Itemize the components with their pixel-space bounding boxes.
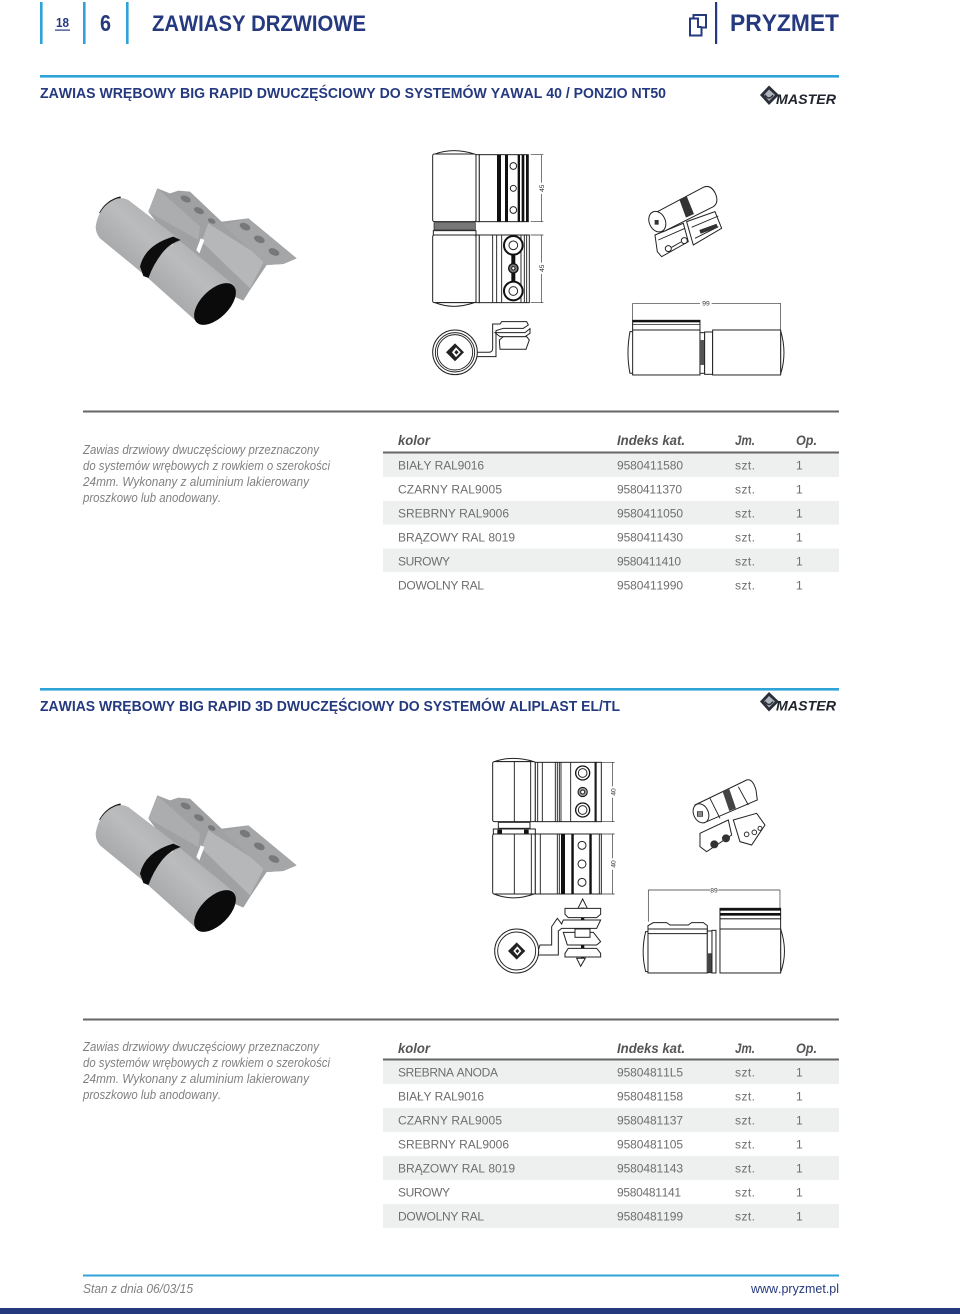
row: brązowy: szt.: [735, 1162, 755, 1176]
row: srebrna anoda: SREBRNA ANODA: [398, 1066, 498, 1080]
row: czarny: [398, 482, 803, 496]
row: dowolny: szt.: [735, 1210, 755, 1224]
logo: Master section 2: [760, 692, 837, 714]
section 1 heading: ZAWIAS WRĘBOWY BIG RAPID DWUCZĘŚCIOWY DO SYSTEMÓW YAWAL 40 / PONZIO NT50: [40, 84, 666, 102]
technical drawing: side view with dimension 99 section 1: 99: [702, 301, 710, 308]
row: srebrny: 1: [796, 1138, 803, 1152]
row: srebrny: 9580481105: [617, 1138, 683, 1152]
table header: kolor: [398, 432, 431, 448]
table header: Jm.: [735, 432, 755, 448]
row: brązowy: 1: [796, 530, 803, 544]
row: biały: 9580411580: [617, 458, 683, 472]
footer: www.pryzmet.pl: [750, 1281, 839, 1296]
description section 2: [82, 1040, 331, 1102]
row: surowy: 1: [796, 1186, 803, 1200]
row: dowolny: 1: [796, 578, 803, 592]
header: page number and section: 6: [100, 10, 111, 36]
row: czarny: 1: [796, 482, 803, 496]
table header: Op.: [796, 1040, 817, 1056]
row: biały: szt.: [735, 1090, 755, 1104]
footer: Stan z dnia 06/03/15: [83, 1282, 193, 1296]
row: dowolny: [398, 578, 803, 592]
header: page number and section: 18: [56, 15, 69, 30]
table header: kolor: [398, 1040, 431, 1056]
row: brązowy: BRĄZOWY RAL 8019: [398, 530, 515, 544]
row: surowy: 9580481141: [617, 1186, 681, 1200]
row: czarny: 1: [796, 1114, 803, 1128]
technical drawing: front views section 1: [433, 151, 529, 306]
divider section 2: [83, 1018, 839, 1020]
logo: Master section 1: MASTER: [776, 91, 837, 107]
row: brązowy: 9580481143: [617, 1162, 683, 1176]
technical drawing: isometric view section 2: [690, 780, 765, 852]
row: brązowy: szt.: [735, 530, 755, 544]
photo: hinge section 2: [96, 795, 297, 939]
row: surowy: SUROWY: [398, 554, 450, 568]
row: dowolny: 9580481199: [617, 1210, 683, 1224]
row: srebrna anoda: [398, 1066, 803, 1080]
row: brązowy: 1: [796, 1162, 803, 1176]
table header: Indeks kat.: [617, 1040, 685, 1056]
row: biały: 1: [796, 458, 803, 472]
row: dowolny: 9580411990: [617, 578, 683, 592]
row: srebrny: SREBRNY RAL9006: [398, 506, 509, 520]
row: dowolny: 1: [796, 1210, 803, 1224]
row: czarny: CZARNY RAL9005: [398, 1114, 502, 1128]
row: dowolny: DOWOLNY RAL: [398, 578, 484, 592]
technical drawing: isometric view section 1: [646, 186, 722, 257]
description section 1: 24mm. Wykonany z aluminium lakierowany: [82, 475, 310, 489]
row: srebrny: SREBRNY RAL9006: [398, 1138, 509, 1152]
description section 2: Zawias drzwiowy dwuczęściowy przeznaczony: [82, 1040, 320, 1054]
description section 2: 24mm. Wykonany z aluminium lakierowany: [82, 1072, 310, 1086]
header: page number and section: ZAWIASY DRZWIOWE: [152, 11, 366, 36]
footer: [0, 1274, 960, 1314]
row: biały: szt.: [735, 458, 755, 472]
row: surowy: 9580411410: [617, 554, 681, 568]
row: surowy: [398, 554, 803, 568]
description section 2: proszkowo lub anodowany.: [82, 1088, 221, 1102]
dimension: 40 mm section 2: 40: [610, 788, 617, 796]
row: srebrny: 9580411050: [617, 506, 683, 520]
row: biały: [398, 1090, 803, 1104]
section 2 heading: ZAWIAS WRĘBOWY BIG RAPID 3D DWUCZĘŚCIOWY DO SYSTEMÓW ALIPLAST EL/TL: [40, 697, 620, 715]
row: biały: BIAŁY RAL9016: [398, 1090, 484, 1104]
row: czarny: 9580411370: [617, 482, 682, 496]
table header: [398, 432, 817, 448]
row: surowy: 1: [796, 554, 803, 568]
table header: Jm.: [735, 1040, 755, 1056]
dimension: 45 mm section 1: 45: [539, 264, 546, 272]
description section 1: Zawias drzwiowy dwuczęściowy przeznaczony: [82, 443, 320, 457]
table header: Op.: [796, 432, 817, 448]
row: brązowy: [398, 1162, 803, 1176]
row: surowy: szt.: [735, 1186, 755, 1200]
header: page number and section: [40, 2, 366, 44]
row: czarny: szt.: [735, 482, 755, 496]
row: czarny: CZARNY RAL9005: [398, 482, 502, 496]
photo: hinge section 1: [96, 188, 297, 332]
row: dowolny: DOWOLNY RAL: [398, 1210, 484, 1224]
row: srebrny: szt.: [735, 1138, 755, 1152]
dimension: 45 mm section 1: 45: [539, 184, 546, 192]
technical drawing: front views section 2: [493, 758, 601, 898]
row: biały: 9580481158: [617, 1090, 683, 1104]
technical drawing: side view with dimension 89 section 2: [643, 888, 784, 973]
row: surowy: SUROWY: [398, 1186, 450, 1200]
technical drawing: side view with dimension 99 section 1: [628, 301, 784, 375]
dimension: 40 mm section 2: 40: [610, 860, 617, 868]
row: biały: [398, 458, 803, 472]
logo: Pryzmet: PRYZMET: [730, 10, 839, 37]
technical drawing: side view with dimension 89 section 2: 89: [710, 888, 718, 895]
table header: [398, 1040, 817, 1056]
row: czarny: szt.: [735, 1114, 755, 1128]
row: dowolny: szt.: [735, 578, 755, 592]
dimension: 40 mm section 2: [602, 762, 617, 894]
technical drawing: end view section 2: [495, 899, 601, 973]
description section 2: do systemów wrębowych z rowkiem o szerokości: [83, 1056, 331, 1070]
description section 1: [82, 443, 331, 505]
row: brązowy: 9580411430: [617, 530, 683, 544]
row: surowy: szt.: [735, 554, 755, 568]
row: biały: 1: [796, 1090, 803, 1104]
table header: Indeks kat.: [617, 432, 685, 448]
logo: Master section 2: MASTER: [776, 698, 837, 714]
row: dowolny: [398, 1210, 803, 1224]
divider section 1: [83, 410, 839, 412]
row: czarny: [398, 1114, 803, 1128]
description section 1: proszkowo lub anodowany.: [82, 491, 221, 505]
row: brązowy: BRĄZOWY RAL 8019: [398, 1162, 515, 1176]
row: surowy: [398, 1186, 803, 1200]
dimension: 45 mm section 1: [531, 155, 546, 303]
row: srebrna anoda: 1: [796, 1066, 803, 1080]
description section 1: do systemów wrębowych z rowkiem o szerokości: [83, 459, 331, 473]
technical drawing: end view section 1: [433, 322, 530, 375]
row: srebrny: 1: [796, 506, 803, 520]
row: brązowy: [398, 530, 803, 544]
row: czarny: 9580481137: [617, 1114, 683, 1128]
row: srebrny: szt.: [735, 506, 755, 520]
row: srebrna anoda: szt.: [735, 1066, 755, 1080]
logo: Pryzmet: [690, 2, 839, 44]
table section 2: [383, 1040, 839, 1228]
row: biały: BIAŁY RAL9016: [398, 458, 484, 472]
table section 1: [383, 432, 839, 592]
logo: Master section 1: [760, 86, 837, 107]
row: srebrny: [398, 1138, 803, 1152]
row: srebrny: [398, 506, 803, 520]
row: srebrna anoda: 95804811L5: [617, 1066, 683, 1080]
